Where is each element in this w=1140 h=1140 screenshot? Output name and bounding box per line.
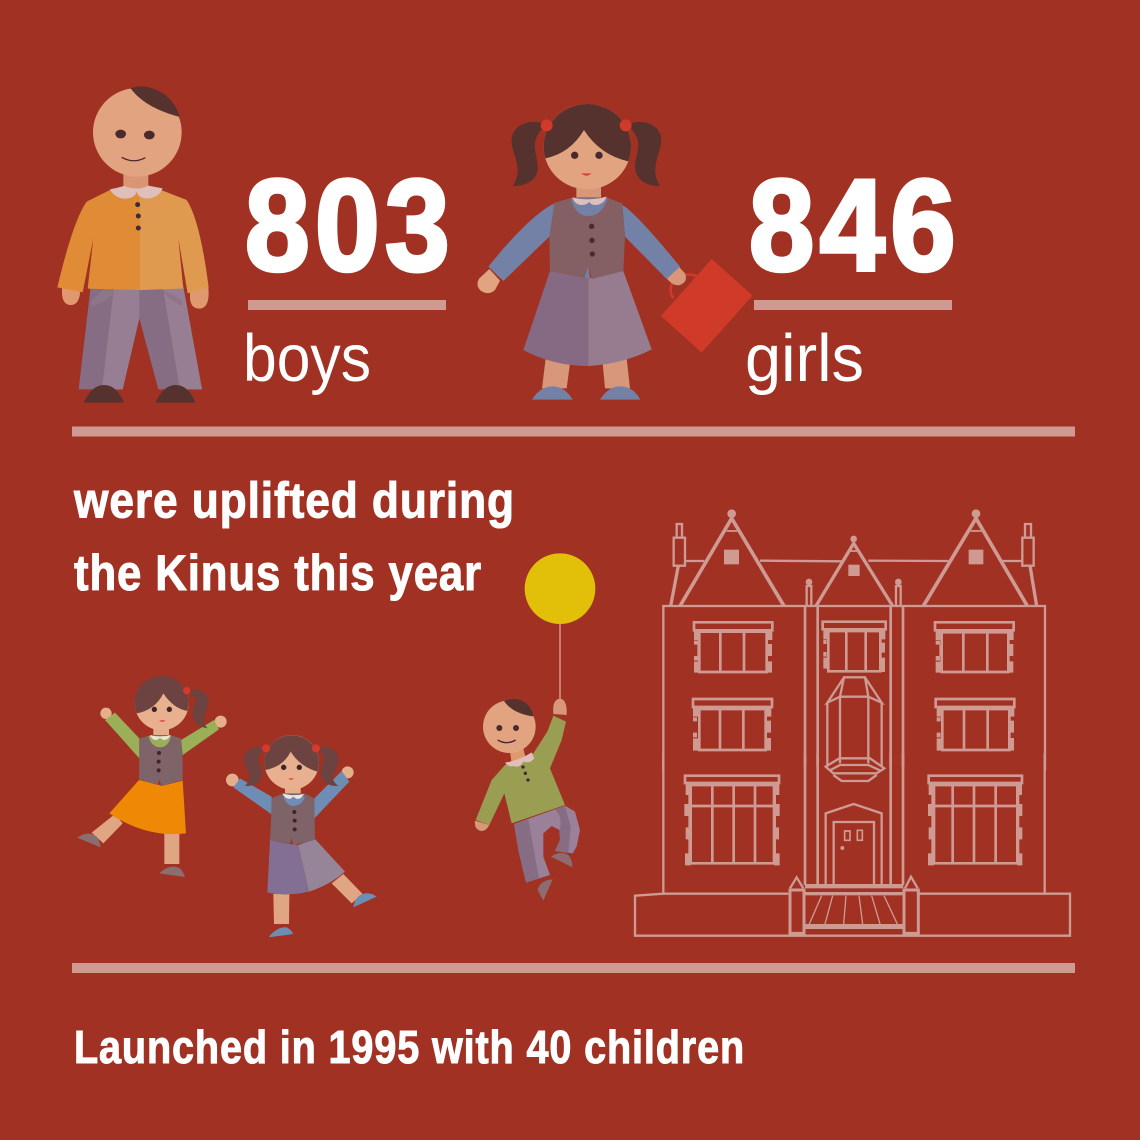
illustration: school building outline: [635, 509, 1070, 936]
heading: were uplifted: [73, 472, 515, 601]
count: girls: girls: [745, 321, 864, 396]
divider: upper: [72, 426, 1075, 436]
building upper: roofs and upper windows: [663, 509, 1045, 770]
icon: standing girl with bag: [477, 104, 753, 400]
count: boys: boys: [243, 321, 371, 396]
count: boys: [243, 152, 455, 396]
count: boys: 803: [245, 152, 455, 298]
icon: jumping boy with yellow balloon: [475, 553, 595, 901]
count: girls: 846: [749, 152, 961, 298]
building lower: entrance, bay base, ground windows and plinth: [635, 753, 1070, 936]
footer text: Launched in 1995 with 40 children: [74, 1021, 745, 1073]
icon: standing boy: [57, 87, 209, 403]
icon: dancing girl in purple skirt: [226, 735, 377, 937]
heading: were uplifted: the Kinus this year: [74, 545, 482, 601]
icon: dancing girl in orange skirt: [77, 676, 227, 877]
heading: were uplifted: were uplifted during: [73, 472, 515, 528]
divider: lower: [72, 963, 1075, 973]
count: girls: [745, 152, 961, 396]
